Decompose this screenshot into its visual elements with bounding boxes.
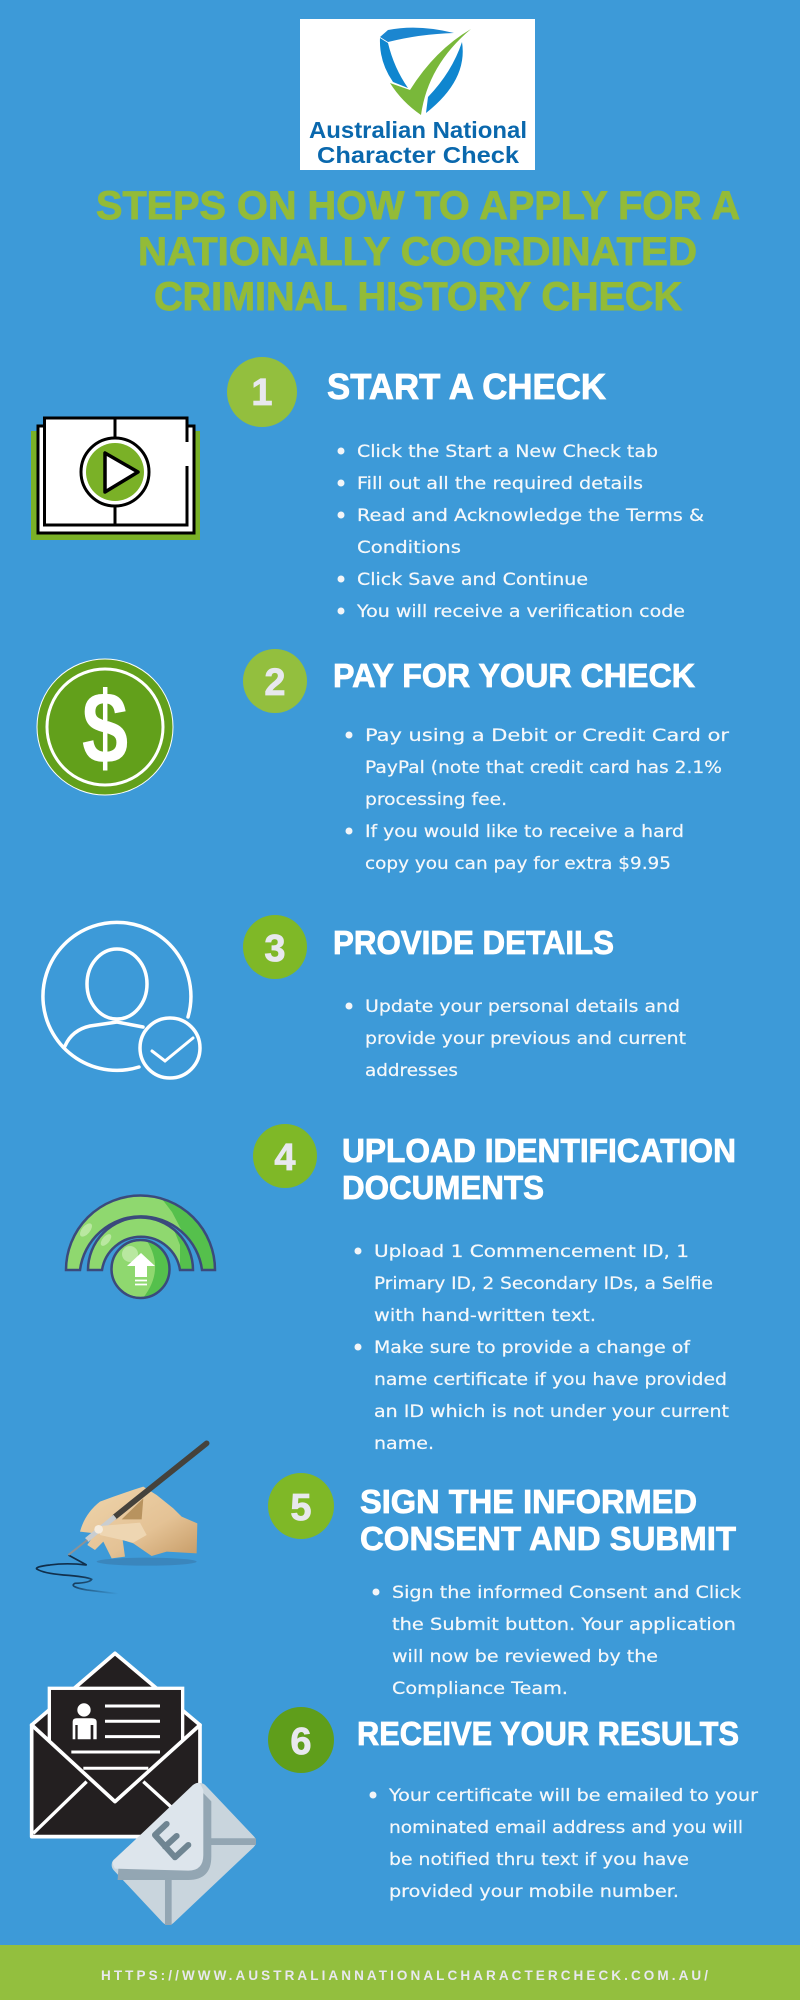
step 6 list: nominated email address and you will	[389, 1818, 743, 1838]
step 2 list: Pay using a Debit or Credit Card or	[365, 726, 729, 746]
step 5 number: 5	[290, 1487, 312, 1529]
step 4 heading: UPLOAD IDENTIFICATION	[342, 1132, 736, 1169]
step 4 list: name certificate if you have provided	[374, 1370, 727, 1390]
step 3 list: Update your personal details and	[365, 997, 680, 1017]
title	[96, 184, 740, 319]
icon: verified user	[43, 922, 200, 1078]
step 1 number: 1	[251, 372, 273, 414]
step 5 heading: CONSENT AND SUBMIT	[360, 1520, 736, 1557]
title: STEPS ON HOW TO APPLY FOR A	[96, 184, 740, 228]
step 2 number: 2	[264, 662, 286, 704]
step 5 list	[372, 1583, 741, 1699]
step 6 number	[268, 1707, 334, 1773]
step 6 list: Your certificate will be emailed to your	[388, 1786, 758, 1806]
footer bar	[0, 1945, 800, 2000]
step 4 heading	[342, 1132, 736, 1206]
step 4 number: 4	[274, 1137, 296, 1179]
step 4 heading: DOCUMENTS	[342, 1169, 544, 1206]
step 6 list: provided your mobile number.	[389, 1882, 679, 1902]
step 6 list: be notified thru text if you have	[389, 1850, 689, 1870]
step 4 list: with hand-written text.	[374, 1306, 596, 1326]
step 5 list: Sign the informed Consent and Click	[392, 1583, 741, 1603]
step 6 number: 6	[290, 1721, 312, 1763]
step 4 list: Primary ID, 2 Secondary IDs, a Selfie	[374, 1274, 713, 1294]
title: CRIMINAL HISTORY CHECK	[154, 275, 682, 319]
step 2 list: PayPal (note that credit card has 2.1%	[365, 758, 722, 778]
step 1 heading: START A CHECK	[327, 366, 606, 407]
step 1 list: Click Save and Continue	[357, 570, 588, 590]
icon: open envelope with ID card	[32, 1653, 200, 1837]
title: NATIONALLY COORDINATED	[138, 230, 697, 274]
step 2 list	[346, 726, 729, 874]
logo: Character Check	[317, 142, 519, 168]
step 1 list: Conditions	[357, 538, 461, 558]
step 2 list: If you would like to receive a hard	[365, 822, 684, 842]
step 3 number	[243, 915, 307, 979]
step 2 list: copy you can pay for extra $9.95	[365, 854, 671, 874]
step 4 number	[253, 1124, 317, 1188]
step 3 list: provide your previous and current	[365, 1029, 686, 1049]
step 4 list: name.	[374, 1434, 434, 1454]
step 3 list: addresses	[365, 1061, 458, 1081]
step 4 list	[354, 1242, 729, 1454]
icon: video book	[31, 418, 200, 540]
step 3 number: 3	[264, 928, 286, 970]
step 1 list: Fill out all the required details	[357, 474, 643, 494]
icon: upload signal	[66, 1190, 230, 1298]
step 3 list	[346, 997, 686, 1081]
step 1 list: Click the Start a New Check tab	[357, 442, 658, 462]
step 6 list	[370, 1786, 758, 1902]
step 1 list: Read and Acknowledge the Terms &	[357, 506, 704, 526]
icon: dollar coin: $	[82, 671, 128, 785]
step 4 list: Make sure to provide a change of	[374, 1338, 691, 1358]
step 6 heading: RECEIVE YOUR RESULTS	[357, 1715, 739, 1752]
step 5 list: Compliance Team.	[392, 1679, 568, 1699]
step 5 number	[268, 1473, 334, 1539]
step 5 list: will now be reviewed by the	[392, 1647, 658, 1667]
step 2 heading: PAY FOR YOUR CHECK	[333, 657, 695, 694]
step 5 heading	[360, 1483, 736, 1557]
step 4 list: an ID which is not under your current	[374, 1402, 729, 1422]
icon: dollar coin	[37, 659, 173, 795]
logo	[300, 19, 535, 170]
step 5 list: the Submit button. Your application	[392, 1615, 736, 1635]
step 2 list: processing fee.	[365, 790, 507, 810]
icon: small grey envelope	[113, 1783, 256, 1925]
step 3 heading: PROVIDE DETAILS	[333, 924, 614, 961]
step 2 number	[243, 649, 307, 713]
logo: Australian National	[309, 117, 527, 143]
step 1 list	[338, 442, 704, 622]
step 1 number	[227, 357, 297, 427]
step 1 list: You will receive a verification code	[356, 602, 685, 622]
footer bar: HTTPS://WWW.AUSTRALIANNATIONALCHARACTERCHECK.COM.AU/	[101, 1968, 708, 1983]
step 5 heading: SIGN THE INFORMED	[360, 1483, 697, 1520]
step 4 list: Upload 1 Commencement ID, 1	[374, 1242, 689, 1262]
icon: hand signing with pen	[36, 1443, 207, 1594]
